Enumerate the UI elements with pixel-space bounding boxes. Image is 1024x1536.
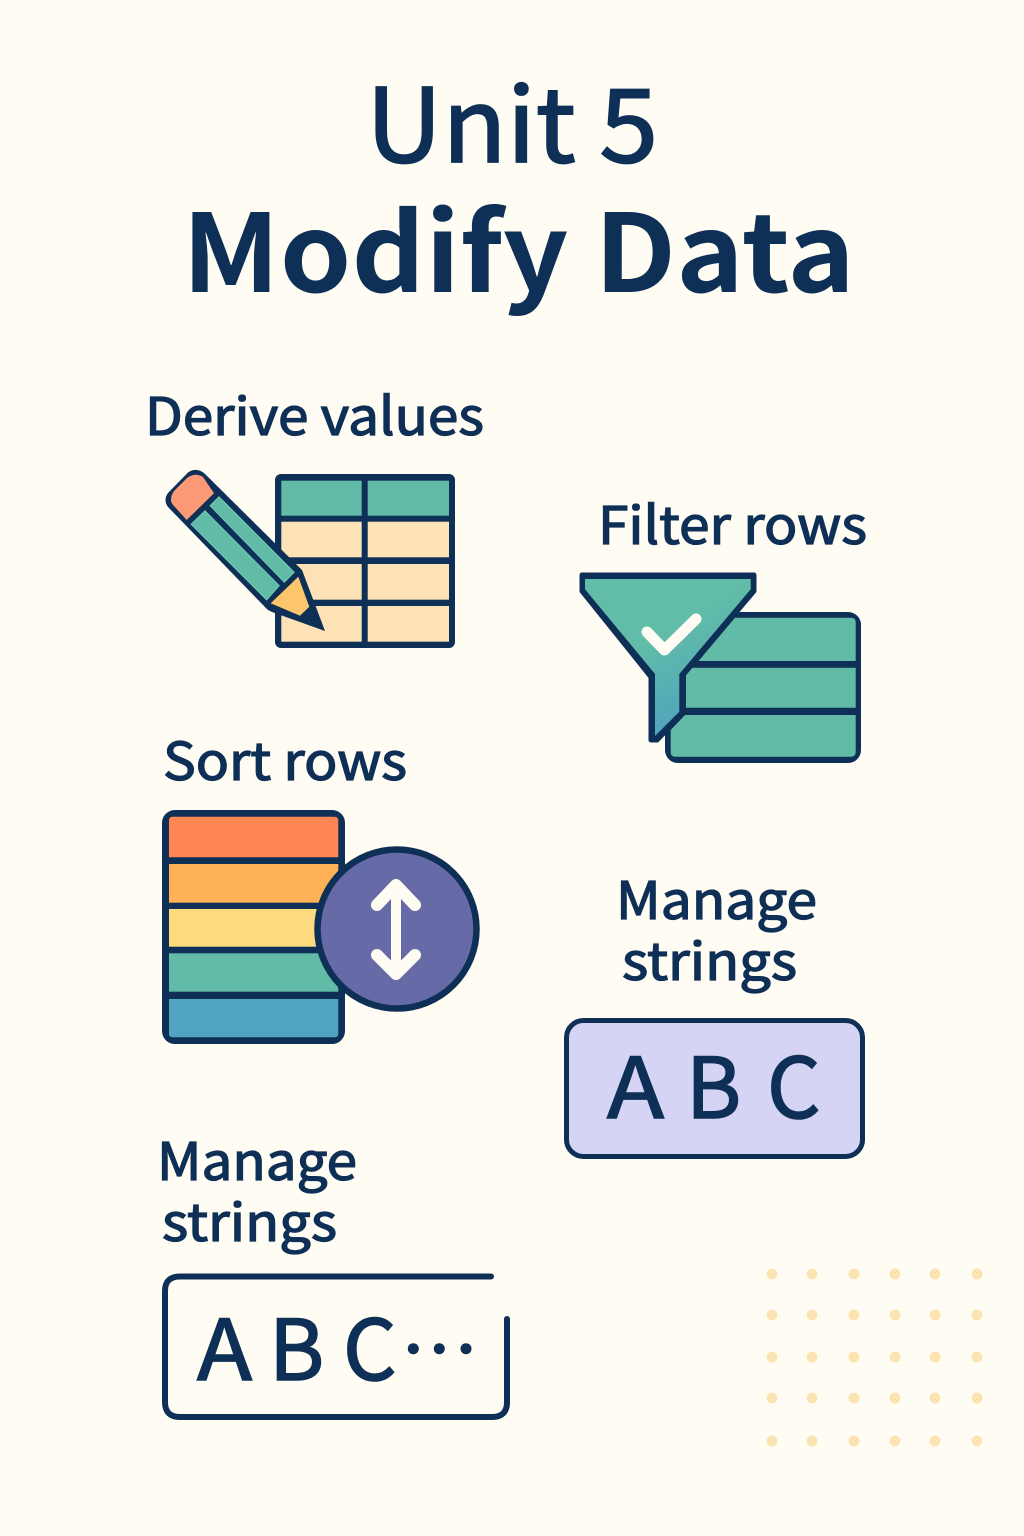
heading: manage strings right: strings: [622, 920, 797, 995]
heading: manage strings right: Manage: [616, 859, 817, 934]
heading: manage strings left: [157, 1120, 357, 1256]
dot grid decoration: [767, 1269, 982, 1446]
icon: table with pencil: [166, 470, 452, 645]
icon: funnel over table: [582, 575, 859, 761]
icon: ABC box: A: [607, 1022, 664, 1143]
heading: filter rows: Filter rows: [598, 484, 867, 559]
title: Modify Data: [182, 168, 855, 324]
heading: manage strings left: strings: [162, 1181, 337, 1256]
pencil: [166, 470, 325, 631]
icon: check mark: [647, 619, 696, 650]
icon: truncated ABC box: A: [197, 1284, 252, 1405]
icon: truncated ABC box: B: [269, 1284, 324, 1405]
sort circle: [318, 850, 476, 1008]
icon: sorted rows: [165, 813, 476, 1041]
icon: ABC box: [566, 1020, 862, 1156]
heading: manage strings right: [616, 859, 817, 995]
colored table: [165, 813, 342, 1041]
heading: sort rows: Sort rows: [163, 720, 407, 795]
rows table: [667, 614, 859, 761]
heading: derive values: Derive values: [145, 375, 484, 450]
icon: ABC box: B: [686, 1022, 741, 1143]
icon: truncated ABC box: [165, 1276, 507, 1417]
icon: ABC box: C: [767, 1022, 821, 1143]
heading: manage strings left: Manage: [157, 1120, 357, 1195]
icon: up and down arrow: [377, 885, 415, 974]
title: Unit 5: [366, 45, 658, 192]
table: [278, 477, 452, 645]
title: [182, 45, 855, 324]
icon: truncated ABC box: C: [343, 1284, 397, 1405]
funnel: [582, 575, 754, 740]
